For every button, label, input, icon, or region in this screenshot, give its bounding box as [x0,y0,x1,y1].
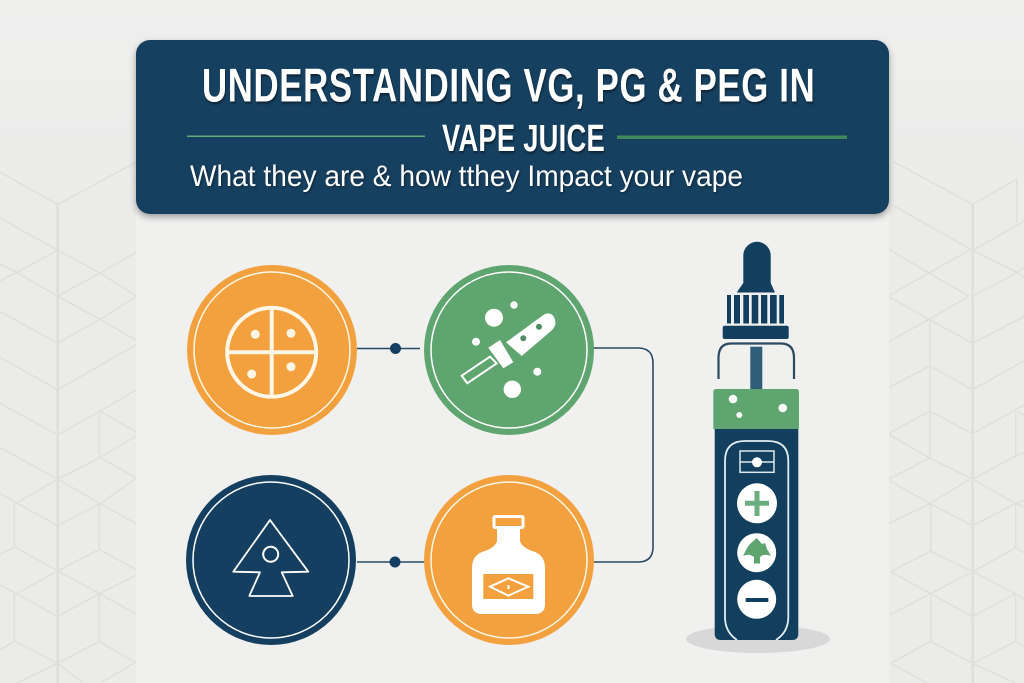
vape bottle [686,242,830,653]
circle: green dropper [424,265,594,435]
icon: bottle [472,516,545,614]
bottle shadow [686,625,830,653]
tagline: What they are & how tthey Impact your vape [190,160,743,193]
circle: orange molecule [187,265,357,435]
button: leaf [737,533,776,572]
connector: right bracket [593,348,653,562]
icon: display window [740,451,774,472]
dropper bulb [737,242,775,292]
subtitle: vape juice: VAPE JUICE [442,118,605,160]
icon: divided circle [227,308,316,397]
panel: central content background [136,200,889,683]
connector: bottom row [357,556,425,568]
left geometric pattern [0,162,137,683]
icon: arrow with ring [233,520,308,596]
cap collar [723,326,789,339]
control panel outline [725,441,788,640]
left green divider [187,136,425,137]
liquid section [713,389,799,429]
title: UNDERSTANDING VG, PG & PEG IN [202,59,815,112]
button: minus [737,580,776,619]
circle: orange bottle [424,475,594,645]
bottle body [715,429,798,640]
ribbed cap [727,295,784,324]
circle: navy arrow [186,475,356,645]
icon: dropper with bubbles [462,301,555,398]
right green divider [617,136,847,139]
right geometric pattern [888,162,1024,683]
panel: title banner [136,40,889,214]
glass shoulder outline [718,344,794,379]
button: plus [737,483,777,523]
connector: top row [357,343,420,354]
dropper tube [750,347,762,390]
